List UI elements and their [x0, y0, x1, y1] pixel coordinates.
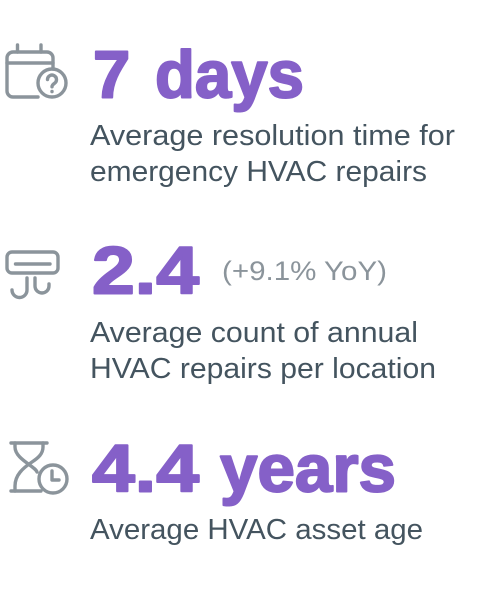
icon: calendar with question mark — [7, 45, 66, 97]
description: emergency repairs: emergency HVAC repairs — [90, 156, 427, 188]
change: year over year: (+9.1% YoY) — [222, 256, 387, 286]
stat: 7 days: 7 — [93, 38, 130, 112]
stat: 4.4 years: years — [220, 432, 396, 506]
description: emergency repairs: Average resolution time for — [90, 120, 455, 152]
stat: 7 days: days — [155, 38, 304, 112]
description: emergency repairs — [90, 120, 455, 188]
icon: air conditioner — [7, 252, 58, 298]
stat: 4.4 years: 4.4 — [92, 432, 199, 506]
description: annual repairs: HVAC repairs per location — [90, 353, 436, 385]
stat: 2.4: 2.4 — [92, 234, 199, 308]
description: annual repairs: Average count of annual — [90, 317, 418, 349]
description: annual repairs — [90, 317, 436, 385]
description: asset age: Average HVAC asset age — [90, 514, 423, 546]
icon: hourglass with clock — [11, 443, 67, 493]
